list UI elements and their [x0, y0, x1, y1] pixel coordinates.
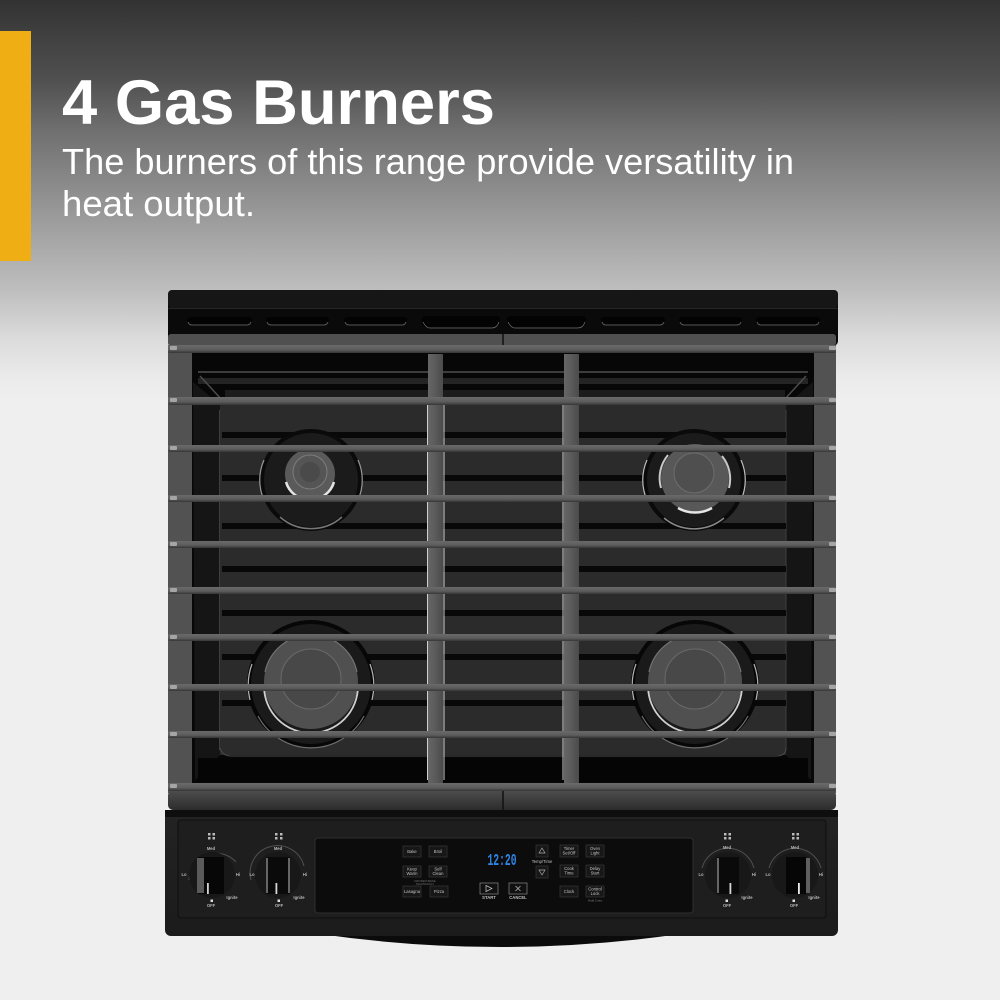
range cooktop	[168, 290, 838, 810]
grate bar tips	[170, 346, 836, 788]
control panel	[165, 810, 838, 947]
knob: left front: Ignite	[293, 895, 305, 900]
knob: left front: OFF	[275, 903, 284, 908]
knob: left rear: Ignite	[226, 895, 238, 900]
knob: right rear: OFF	[723, 903, 732, 908]
knob: right rear: Hi	[752, 872, 756, 877]
oven buttons left: Warm	[406, 871, 418, 876]
oven buttons right: Time	[564, 870, 574, 876]
oven buttons left: Pizza	[434, 889, 445, 894]
knob: right front: Lo	[765, 872, 771, 877]
burner: front left	[248, 622, 374, 748]
grate rear and front lips	[168, 334, 836, 810]
temperature and time buttons	[532, 845, 553, 878]
knob: right front: OFF	[790, 903, 799, 908]
display panel	[315, 838, 693, 913]
grate side rails	[168, 345, 836, 793]
knob: right rear: Lo	[698, 872, 704, 877]
oven buttons left: Lasagna	[404, 889, 421, 894]
oven buttons right: Start	[591, 870, 600, 876]
oven buttons right: Set/Off	[563, 850, 576, 856]
knob: left rear: OFF	[207, 903, 216, 908]
oven buttons right: Control	[588, 886, 602, 892]
cancel button: CANCEL	[509, 895, 527, 900]
curved base under range	[320, 934, 680, 947]
title: 4 Gas Burners	[62, 68, 495, 138]
oven buttons right: Oven	[590, 846, 601, 851]
temperature and time buttons: Temp/Time	[532, 859, 553, 864]
oven buttons left: TECHNOLOGY	[416, 882, 434, 886]
panel body	[165, 812, 838, 936]
knob: left front: Hi	[303, 872, 307, 877]
knob: left front: Lo	[249, 872, 255, 877]
oven buttons right: Lock	[591, 891, 600, 896]
knob: right rear	[698, 833, 756, 908]
oven buttons right: Delay	[590, 866, 601, 871]
start button: START	[482, 895, 496, 900]
knob: left rear: Lo	[181, 872, 187, 877]
oven buttons left: Broil	[434, 849, 442, 854]
oven buttons left	[403, 846, 448, 897]
burner: rear right	[643, 431, 745, 529]
oven buttons left: Clean	[433, 871, 444, 876]
oven buttons left: Keep	[407, 866, 418, 872]
cancel button	[509, 883, 527, 900]
oven buttons right: Clock	[564, 889, 575, 894]
grate vertical bars	[428, 354, 579, 784]
knob: left front: Med	[274, 846, 283, 851]
knob: right front	[765, 833, 823, 908]
knob: left rear	[181, 833, 240, 908]
oven buttons right: Timer	[564, 846, 575, 851]
knob: left rear: Hi	[236, 872, 240, 877]
knob: right front: Ignite	[808, 895, 820, 900]
subtitle: heat output.	[62, 183, 255, 224]
clock display: 12:20	[488, 851, 516, 870]
knob: right rear: Ignite	[741, 895, 753, 900]
grate horizontal bars	[168, 345, 836, 791]
yellow accent bar	[0, 31, 31, 261]
oven buttons right: Hold 3 sec	[588, 898, 603, 902]
knob: right rear: Med	[723, 845, 732, 850]
oven buttons left: Self	[434, 866, 442, 872]
rear vent deck	[168, 290, 838, 346]
burner: front right	[632, 622, 758, 748]
knob: left rear: Med	[207, 846, 216, 851]
oven buttons right	[560, 845, 604, 902]
knob: left front	[249, 833, 307, 908]
cooktop floor	[190, 350, 816, 790]
knob: right front: Hi	[819, 872, 823, 877]
start button	[480, 883, 498, 900]
oven buttons right: Cook	[564, 866, 575, 871]
oven buttons left: Bake	[407, 849, 417, 854]
subtitle: The burners of this range provide versatility in	[62, 141, 794, 182]
oven buttons right: Light	[590, 850, 600, 856]
oven buttons left: FROZEN BAKE	[414, 879, 436, 883]
background gradient	[0, 0, 1000, 400]
burner: rear left	[260, 431, 362, 529]
knob: right front: Med	[791, 845, 800, 850]
